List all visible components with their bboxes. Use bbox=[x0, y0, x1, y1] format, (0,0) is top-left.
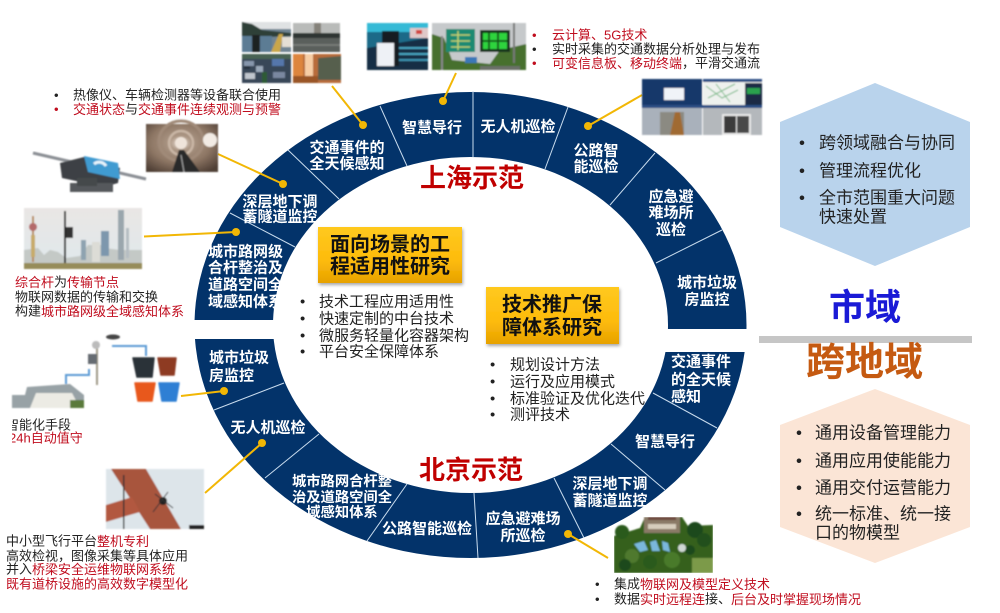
segment labels: Shanghai: 智慧导行 bbox=[402, 118, 462, 136]
segment labels: Shanghai: 全天候感知 bbox=[309, 154, 385, 172]
bullet list: engineering research: • bbox=[300, 294, 305, 310]
segment labels: Beijing: 域感知体系 bbox=[306, 503, 378, 521]
segment labels: Beijing: 所巡检 bbox=[500, 526, 546, 544]
connector: highway inspection bbox=[584, 95, 642, 130]
icon: thermal sensor device bbox=[33, 153, 146, 192]
segment labels: Shanghai: 无人机巡检 bbox=[480, 118, 556, 136]
segment labels: Beijing: 城市路网合杆整 bbox=[292, 472, 392, 490]
bullet list: promotion research: • bbox=[490, 390, 495, 408]
text: drone platform: 高效检视，图像采集等具体应用 bbox=[6, 548, 188, 564]
panel: cross-region hexagon: • bbox=[796, 424, 802, 442]
divider bar bbox=[759, 336, 972, 343]
heading: Beijing demonstration: 北京示范 bbox=[419, 455, 523, 485]
panel: city-level hexagon bbox=[780, 83, 970, 266]
segment labels: Shanghai: 深层地下调 bbox=[242, 194, 318, 210]
text: cloud computing and 5G: 可变信息板、移动终端，平滑交通流 bbox=[552, 56, 760, 70]
bullet list: engineering research: 技术工程应用适用性 bbox=[319, 292, 454, 310]
segment labels: Shanghai: 巡检 bbox=[656, 220, 686, 238]
text: thermal sensors and monitoring: 热像仪、车辆检测器等设备联合使用 bbox=[73, 88, 281, 102]
text: cloud computing and 5G: • bbox=[532, 28, 537, 42]
bullet list: engineering research: 快速定制的中台技术 bbox=[319, 310, 454, 328]
segment labels: Beijing: 无人机巡检 bbox=[230, 418, 306, 436]
bullet list: engineering research bbox=[300, 292, 469, 360]
building bbox=[12, 384, 84, 408]
panel: city-level hexagon: 管理流程优化 bbox=[819, 162, 921, 180]
panel: city-level hexagon: 跨领域融合与协同 bbox=[819, 134, 955, 152]
text: IoT and model definition: • bbox=[595, 576, 600, 592]
panel: cross-region hexagon: • bbox=[796, 452, 802, 470]
segment labels: Shanghai: 蓄隧道监控 bbox=[242, 208, 318, 226]
segment labels: Beijing: 交通事件 bbox=[671, 352, 731, 370]
sensor pole bbox=[88, 334, 120, 385]
upper ring: Shanghai demonstration bbox=[194, 91, 746, 329]
connector: traffic event sensing bbox=[332, 86, 367, 129]
photo: drone bridge inspection bbox=[106, 469, 204, 529]
panel: city-level hexagon: • bbox=[799, 188, 805, 208]
text: IoT and model definition: • bbox=[595, 592, 600, 606]
connector: garbage room bbox=[181, 387, 228, 396]
bullet list: promotion research: 规划设计方法 bbox=[510, 356, 600, 374]
segment labels: Shanghai: 能巡检 bbox=[573, 158, 619, 176]
lower ring: Beijing demonstration bbox=[195, 339, 745, 558]
segment labels: Shanghai: 域感知体系 bbox=[208, 292, 283, 310]
photo: emergency shelter park model bbox=[614, 517, 713, 573]
connector: emergency shelter bbox=[564, 530, 608, 558]
segment labels: Shanghai: 城市垃圾 bbox=[677, 274, 737, 292]
panel: cross-region hexagon: • bbox=[796, 478, 802, 498]
text: thermal sensors and monitoring: 交通状态与交通事件连续观测与预警 bbox=[73, 102, 281, 116]
panel: cross-region hexagon: 通用应用使能能力 bbox=[815, 450, 951, 470]
text: thermal sensors and monitoring: • bbox=[54, 88, 59, 102]
segment labels: Shanghai: 交通事件的 bbox=[309, 138, 385, 156]
text: IoT and model definition: 集成物联网及模型定义技术 bbox=[614, 576, 770, 592]
segment labels: Beijing: 蓄隧道监控 bbox=[572, 492, 648, 510]
panel: cross-region hexagon: 通用设备管理能力 bbox=[815, 424, 951, 442]
text: cloud computing and 5G bbox=[532, 28, 760, 70]
segment labels: Beijing: 深层地下调 bbox=[572, 476, 648, 492]
bullet list: promotion research: 运行及应用模式 bbox=[510, 372, 615, 390]
connector: smart navigation bbox=[439, 73, 456, 105]
text: IoT and model definition bbox=[595, 576, 861, 606]
bins bbox=[133, 358, 179, 401]
text: intelligent means: 24h自动值守 bbox=[9, 430, 83, 446]
panel: cross-region hexagon: • bbox=[796, 504, 802, 524]
panel: city-level hexagon: 全市范围重大问题 bbox=[819, 188, 955, 208]
bullet list: promotion research: 标准验证及优化迭代 bbox=[510, 390, 645, 408]
text: drone platform bbox=[6, 534, 188, 592]
callout box: scenario engineering research bbox=[318, 227, 462, 283]
photo: Shanghai skyline with smart pole bbox=[24, 208, 142, 269]
segment labels: Shanghai: 难场所 bbox=[648, 204, 694, 222]
diagram: garbage room sensing bbox=[12, 334, 179, 408]
bullet list: promotion research: • bbox=[490, 406, 495, 424]
segment labels: Beijing: 应急避难场 bbox=[485, 510, 561, 528]
text: drone platform: 中小型飞行平台整机专利 bbox=[6, 534, 149, 548]
segment labels: Shanghai: 公路智 bbox=[573, 142, 619, 160]
text: cloud computing and 5G: • bbox=[532, 42, 537, 56]
bullet list: engineering research: • bbox=[300, 344, 305, 360]
segment labels: Beijing: 的全天候 bbox=[671, 370, 731, 388]
bullet list: promotion research: 测评技术 bbox=[510, 406, 570, 424]
text: smart pole network: 综合杆为传输节点 bbox=[15, 274, 119, 290]
heading: cross-region: 跨地域 bbox=[806, 342, 923, 384]
panel: cross-region hexagon: 口的物模型 bbox=[815, 524, 900, 542]
callout box: scenario engineering research: 面向场景的工 bbox=[330, 233, 450, 256]
text: smart pole network bbox=[15, 274, 184, 318]
panel: city-level hexagon: 快速处置 bbox=[819, 208, 887, 226]
connector: drone inspection bbox=[205, 439, 266, 493]
text: drone platform: 既有道桥设施的高效数字模型化 bbox=[6, 576, 188, 592]
panel: cross-region hexagon: 通用交付运营能力 bbox=[815, 478, 951, 498]
panel: city-level hexagon: • bbox=[799, 134, 805, 152]
panel: cross-region hexagon bbox=[780, 389, 970, 563]
heading: Shanghai demonstration: 上海示范 bbox=[420, 163, 524, 193]
text: smart pole network: 构建城市路网级全域感知体系 bbox=[15, 304, 184, 318]
text: cloud computing and 5G: 云计算、5G技术 bbox=[552, 28, 647, 42]
segment labels: Beijing bbox=[209, 348, 731, 544]
segment labels: Beijing: 智慧导行 bbox=[635, 432, 695, 450]
callout box: scenario engineering research: 程适用性研究 bbox=[330, 254, 450, 278]
photo: variable message signs bbox=[432, 23, 526, 70]
heading: city level: 市域 bbox=[829, 286, 901, 328]
bullet list: engineering research: • bbox=[300, 310, 305, 328]
text: intelligent means bbox=[12, 418, 82, 444]
photo: phone navigation bbox=[367, 23, 428, 70]
panel: city-level hexagon: • bbox=[799, 162, 805, 180]
bullet list: engineering research: 微服务轻量化容器架构 bbox=[319, 328, 469, 344]
segment labels: Shanghai: 城市路网级 bbox=[208, 242, 283, 260]
segment labels: Beijing: 感知 bbox=[671, 388, 701, 406]
segment labels: Beijing: 城市垃圾 bbox=[209, 348, 269, 366]
segment labels: Beijing: 公路智能巡检 bbox=[382, 520, 472, 538]
segment labels: Shanghai bbox=[208, 118, 737, 310]
segment labels: Shanghai: 应急避 bbox=[648, 188, 694, 206]
text: IoT and model definition: 数据实时远程连接、后台及时掌握现场情况 bbox=[614, 592, 861, 606]
photo: deep tunnel bbox=[146, 121, 218, 172]
photo collage: traffic events bbox=[242, 22, 341, 83]
text: intelligent means: 智能化手段 bbox=[6, 418, 71, 432]
connector: deep tunnel bbox=[218, 154, 287, 188]
connector: road network pole bbox=[144, 228, 240, 236]
bullet list: engineering research: 平台安全保障体系 bbox=[319, 342, 439, 360]
segment labels: Shanghai: 合杆整治及 bbox=[208, 258, 283, 276]
callout box: technology promotion research: 障体系研究 bbox=[502, 315, 602, 339]
bullet list: engineering research: • bbox=[300, 328, 305, 344]
text: smart pole network: 物联网数据的传输和交换 bbox=[15, 290, 158, 304]
segment labels: Beijing: 治及道路空间全 bbox=[292, 488, 393, 506]
text: thermal sensors and monitoring: • bbox=[54, 102, 59, 116]
callout box: technology promotion research bbox=[486, 287, 619, 344]
segment labels: Beijing: 房监控 bbox=[209, 366, 254, 384]
text: cloud computing and 5G: 实时采集的交通数据分析处理与发布 bbox=[552, 42, 760, 56]
bullet list: promotion research: • bbox=[490, 374, 495, 390]
bullet list: promotion research bbox=[490, 356, 645, 424]
callout box: technology promotion research: 技术推广保 bbox=[502, 293, 602, 316]
segment labels: Shanghai: 房监控 bbox=[684, 290, 730, 308]
text: cloud computing and 5G: • bbox=[532, 56, 537, 70]
text: thermal sensors and monitoring bbox=[54, 88, 281, 116]
segment labels: Shanghai: 道路空间全 bbox=[208, 276, 283, 294]
text: drone platform: 并入桥梁安全运维物联网系统 bbox=[6, 562, 175, 576]
panel: cross-region hexagon: 统一标准、统一接 bbox=[815, 504, 951, 524]
bullet list: promotion research: • bbox=[490, 356, 495, 374]
photo: highway inspection dashboard bbox=[642, 79, 762, 135]
